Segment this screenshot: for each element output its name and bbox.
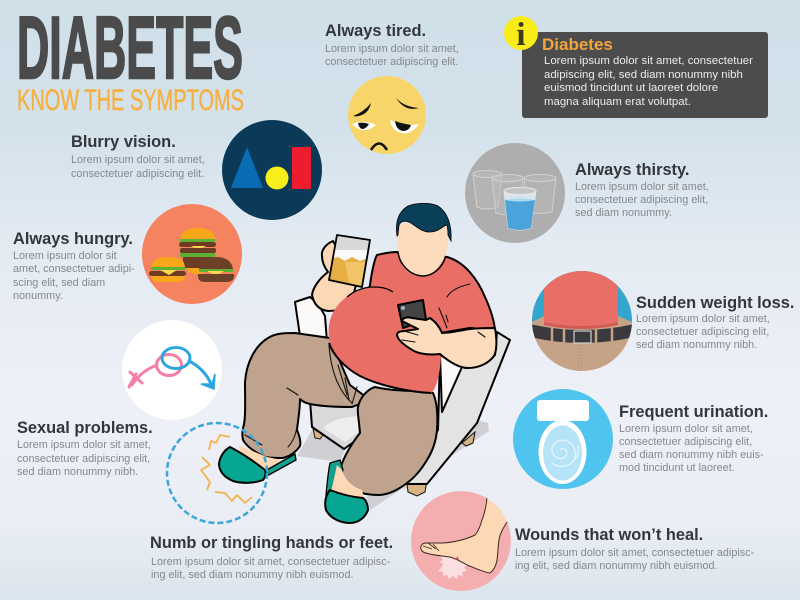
callout: diabetes info box: adipiscing elit, sed diam nonummy nibh	[544, 69, 743, 81]
illustration: man in armchair	[219, 203, 510, 523]
symptom: always tired: Lorem ipsum dolor sit amet,	[325, 43, 459, 55]
symptom: sexual problems: consectetuer adipiscing elit,	[17, 453, 150, 465]
symptom: blurry vision: consectetuer adipiscing elit.	[71, 168, 204, 180]
symptom: always hungry: Lorem ipsum dolor sit	[13, 250, 117, 262]
icon: tired face	[348, 76, 426, 154]
symptom: numb or tingling: Numb or tingling hands or feet.	[150, 534, 393, 552]
callout: diabetes info box: magna aliquam erat volutpat.	[544, 96, 691, 108]
symptom: wounds that won't heal: ing elit, sed diam nonummy nibh euismod.	[515, 560, 718, 572]
symptom: always tired	[325, 22, 459, 68]
callout: diabetes info box: euismod tincidunt ut laoreet dolore	[544, 82, 718, 94]
far leg	[242, 333, 370, 458]
callout: diabetes info box: Lorem ipsum dolor sit amet, consectetuer	[544, 55, 753, 67]
subtitle: KNOW THE SYMPTOMS	[17, 84, 244, 117]
left arm	[312, 241, 356, 311]
burger dark	[198, 257, 234, 282]
symptom: sudden weight loss: Lorem ipsum dolor sit amet,	[636, 313, 770, 325]
symptom: sexual problems: Sexual problems.	[17, 419, 153, 437]
symptom: always tired: Always tired.	[325, 22, 426, 40]
icon: loose belt	[530, 271, 634, 371]
symptom: blurry vision	[71, 133, 205, 180]
symptom: sudden weight loss: consectetuer adipiscing elit,	[636, 326, 769, 338]
symptom: always thirsty	[575, 161, 709, 219]
symptom: numb or tingling: ing elit, sed diam nonummy nibh euismod.	[151, 569, 354, 581]
far foot and slipper	[219, 445, 296, 483]
symptom: frequent urination: mod tincidunt ut laoreet.	[619, 462, 735, 474]
symptom: always thirsty: Always thirsty.	[575, 161, 689, 179]
icon: info badge: i	[516, 17, 526, 53]
symptom: wounds that won't heal: Lorem ipsum dolor sit amet, consectetuer adipisc-	[515, 547, 755, 559]
symptom: always hungry: nonummy.	[13, 290, 63, 302]
shirt folds	[439, 284, 470, 328]
icon: toilet	[513, 389, 613, 489]
head	[396, 203, 451, 276]
symptom: always thirsty: sed diam nonummy.	[575, 207, 672, 219]
icon: foot wound	[411, 490, 518, 591]
symptom: always hungry	[13, 230, 135, 302]
symptom: wounds that won't heal	[515, 526, 755, 572]
title	[17, 0, 244, 117]
callout: diabetes info box: Diabetes	[542, 35, 613, 54]
chair	[295, 297, 510, 496]
burger stack	[179, 228, 216, 274]
symptom: sexual problems: Lorem ipsum dolor sit amet,	[17, 439, 151, 451]
trouser folds	[245, 345, 357, 447]
symptom: sexual problems: sed diam nonummy nibh.	[17, 466, 138, 478]
symptom: numb or tingling	[150, 534, 393, 581]
callout: diabetes info box	[504, 16, 768, 118]
phone	[398, 300, 426, 328]
highlight: numb foot dashed circle	[167, 423, 267, 523]
symptom: numb or tingling: Lorem ipsum dolor sit amet, consectetuer adipisc-	[151, 556, 391, 568]
symptom: frequent urination	[619, 403, 768, 474]
icon: sexual symbols	[122, 320, 222, 420]
symptom: sudden weight loss: Sudden weight loss.	[636, 294, 794, 312]
icon: burgers	[142, 204, 242, 304]
icon: blurred shapes	[222, 120, 322, 220]
icon: info badge	[504, 16, 538, 53]
near foot and slipper	[325, 460, 368, 523]
chair shadow	[297, 420, 489, 510]
symptom: sexual problems	[17, 419, 153, 478]
symptom: frequent urination: Lorem ipsum dolor sit amet,	[619, 423, 753, 435]
beer glass	[326, 235, 370, 290]
right arm and hand	[397, 317, 496, 368]
near leg	[341, 387, 437, 495]
icon: water glasses	[465, 143, 565, 243]
shirt	[360, 252, 495, 360]
symptom: blurry vision: Blurry vision.	[71, 133, 176, 151]
symptom: always hungry: scing elit, sed diam	[13, 277, 105, 289]
symptom: always thirsty: consectetuer adipiscing elit,	[575, 194, 708, 206]
symptom: sudden weight loss	[636, 294, 794, 351]
burger left	[149, 257, 186, 282]
symptom: frequent urination: Frequent urination.	[619, 403, 768, 421]
symptom: always hungry: Always hungry.	[13, 230, 133, 248]
symptom: always thirsty: Lorem ipsum dolor sit amet,	[575, 181, 709, 193]
belly	[329, 287, 441, 393]
symptom: sudden weight loss: sed diam nonummy nibh.	[636, 339, 757, 351]
symptom: always tired: consectetuer adipiscing elit.	[325, 56, 458, 68]
symptom: blurry vision: Lorem ipsum dolor sit amet,	[71, 154, 205, 166]
symptom: frequent urination: consectetuer adipiscing elit,	[619, 436, 752, 448]
symptom: frequent urination: sed diam nonummy nibh euis-	[619, 449, 764, 461]
title: DIABETES	[17, 0, 243, 97]
symptom: wounds that won't heal: Wounds that won’t heal.	[515, 526, 703, 544]
tingling zigzags	[201, 435, 252, 503]
symptom: always hungry: amet, consectetuer adipi-	[13, 263, 135, 275]
